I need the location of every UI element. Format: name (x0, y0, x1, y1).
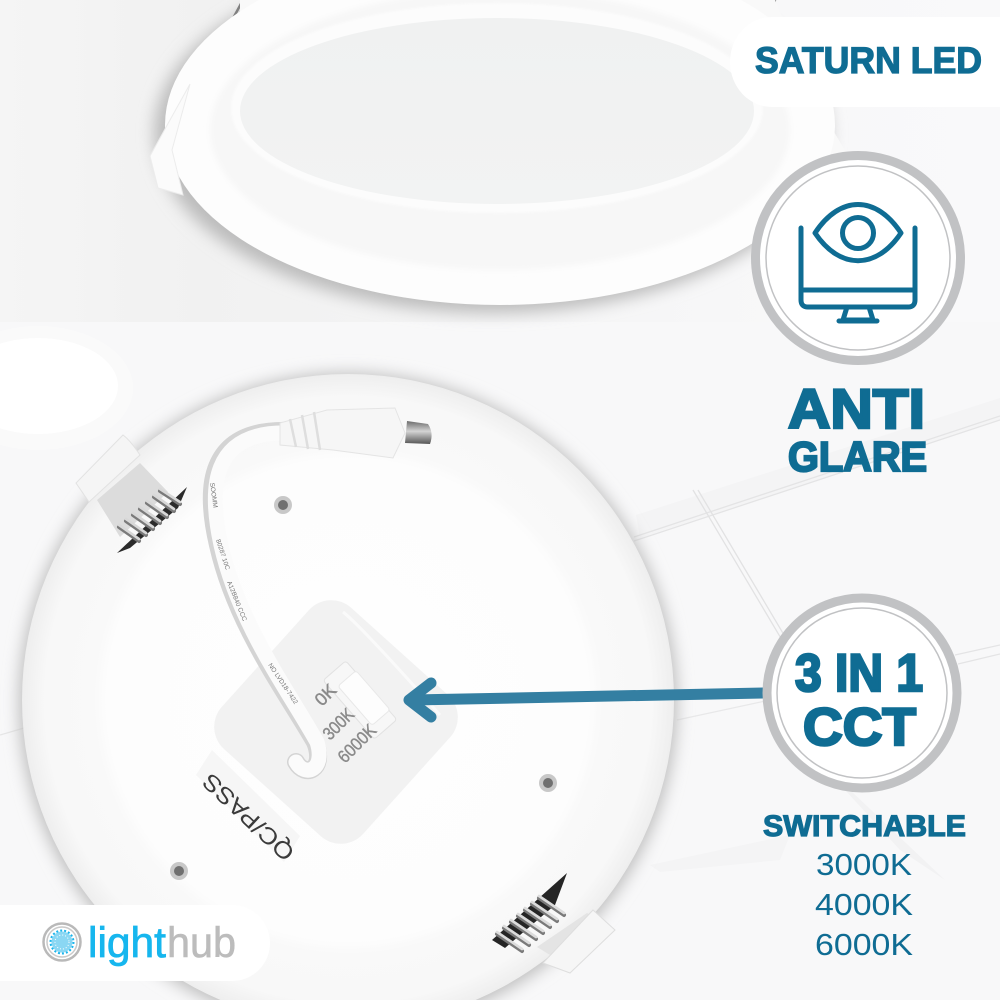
callout arrow (409, 683, 765, 717)
icon: eye on monitor (801, 204, 915, 321)
clip: top left (76, 435, 187, 553)
inner reflector (210, 0, 790, 270)
switch frame (323, 661, 397, 739)
product name badge (730, 17, 1000, 107)
cable (208, 431, 319, 770)
switch labels: 0K (311, 680, 340, 710)
cable: NO LVD18-7422 (266, 662, 299, 706)
switchable colour temperatures: 6000K (815, 927, 913, 962)
brand logo badge: hub (167, 919, 236, 967)
heading: anti glare (788, 377, 927, 480)
brand logo badge (0, 905, 270, 981)
switch labels (311, 680, 380, 767)
driver box (202, 588, 470, 856)
heading: anti glare: ANTI (788, 377, 925, 440)
cable: SOOMM (208, 482, 218, 508)
outer rim (165, 0, 835, 305)
switchable colour temperatures (763, 810, 966, 962)
drop shadow (154, 0, 830, 313)
outer disc (22, 374, 674, 1000)
3 in 1 CCT badge: 3 IN 1 (795, 644, 923, 703)
switch labels: 6000K (334, 720, 380, 767)
background: ceiling tiles (0, 398, 1000, 880)
downlight rear view (19, 373, 677, 1000)
recessed downlight, front view (150, 0, 846, 313)
QC/PASS sticker (196, 750, 300, 866)
3 in 1 CCT badge (767, 598, 957, 788)
background: ceiling lamp glow (0, 326, 133, 450)
DC connector (280, 408, 432, 458)
switchable colour temperatures: 3000K (816, 847, 912, 882)
QC/PASS sticker: QC/PASS (197, 768, 299, 866)
lamp body (200, 0, 846, 160)
product name badge: SATURN LED (755, 40, 982, 81)
switchable colour temperatures: SWITCHABLE (763, 810, 966, 843)
switchable colour temperatures: 4000K (815, 887, 913, 922)
icon: lighthub dotted circle (44, 924, 80, 960)
switch labels: 300K (319, 704, 358, 744)
anti-glare badge (756, 156, 960, 360)
3 in 1 CCT badge: CCT (803, 698, 916, 757)
rim side tab (150, 84, 190, 195)
slider (338, 671, 390, 725)
white band around lens (231, 3, 763, 213)
drop shadow (19, 373, 677, 1000)
spring wires (197, 0, 775, 85)
screws (170, 496, 557, 880)
cable: A12B840 CCC (225, 580, 248, 623)
frosted lens (240, 18, 754, 204)
cable: 80287 10C (214, 538, 231, 571)
clip: bottom right (492, 873, 615, 973)
brand logo badge: light (88, 919, 166, 967)
heading: anti glare: GLARE (788, 433, 927, 480)
